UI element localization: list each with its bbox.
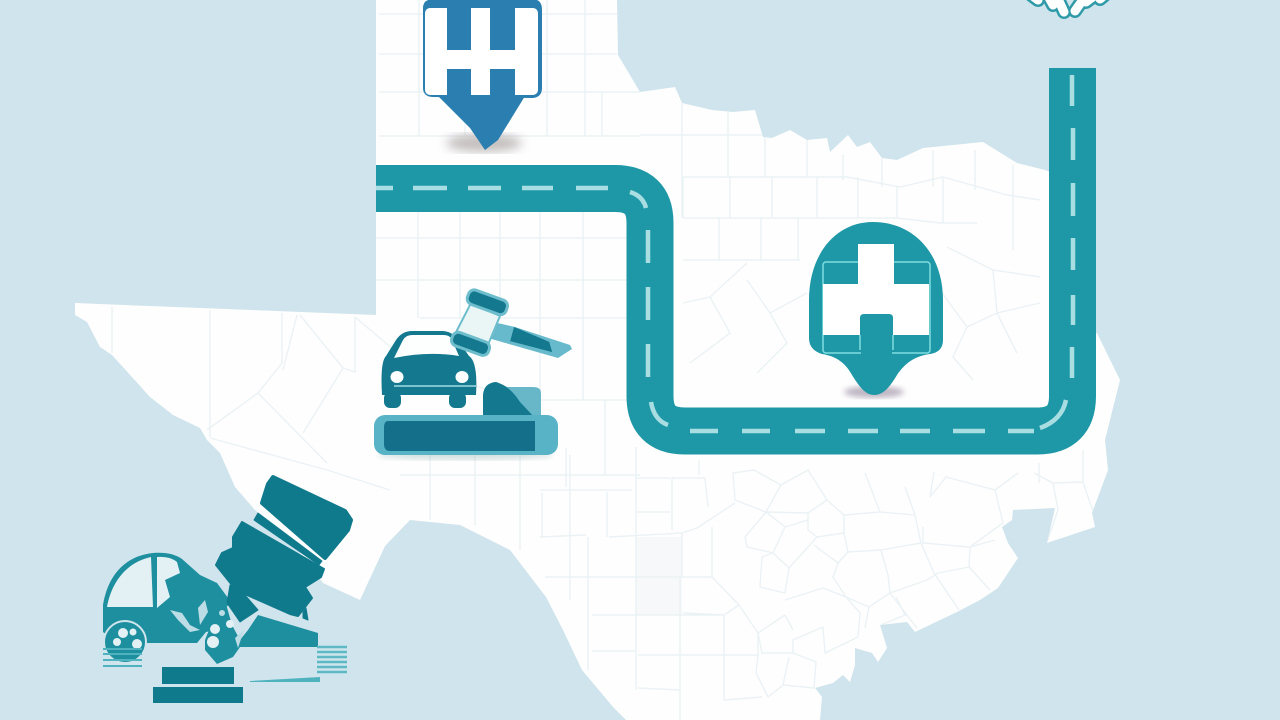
icon: handshake partly cropped [1030, 0, 1106, 12]
panhandle [379, 0, 640, 136]
north central [640, 135, 1040, 260]
icon: blue hospital location pin [423, 0, 542, 152]
sound block base [153, 667, 320, 703]
gavel head and handle [450, 288, 572, 358]
road: winding route [376, 68, 1073, 431]
sound block [374, 382, 558, 460]
big gavel head [216, 477, 351, 622]
south grid [540, 447, 762, 720]
crashed car [103, 553, 231, 666]
icon: car crash with large gavel [103, 477, 351, 703]
west [112, 307, 485, 490]
icon: car and gavel [374, 288, 572, 460]
car front [382, 331, 476, 408]
icon: teal medical location pin [809, 222, 943, 398]
second car [205, 604, 347, 672]
east cells [733, 450, 1095, 697]
